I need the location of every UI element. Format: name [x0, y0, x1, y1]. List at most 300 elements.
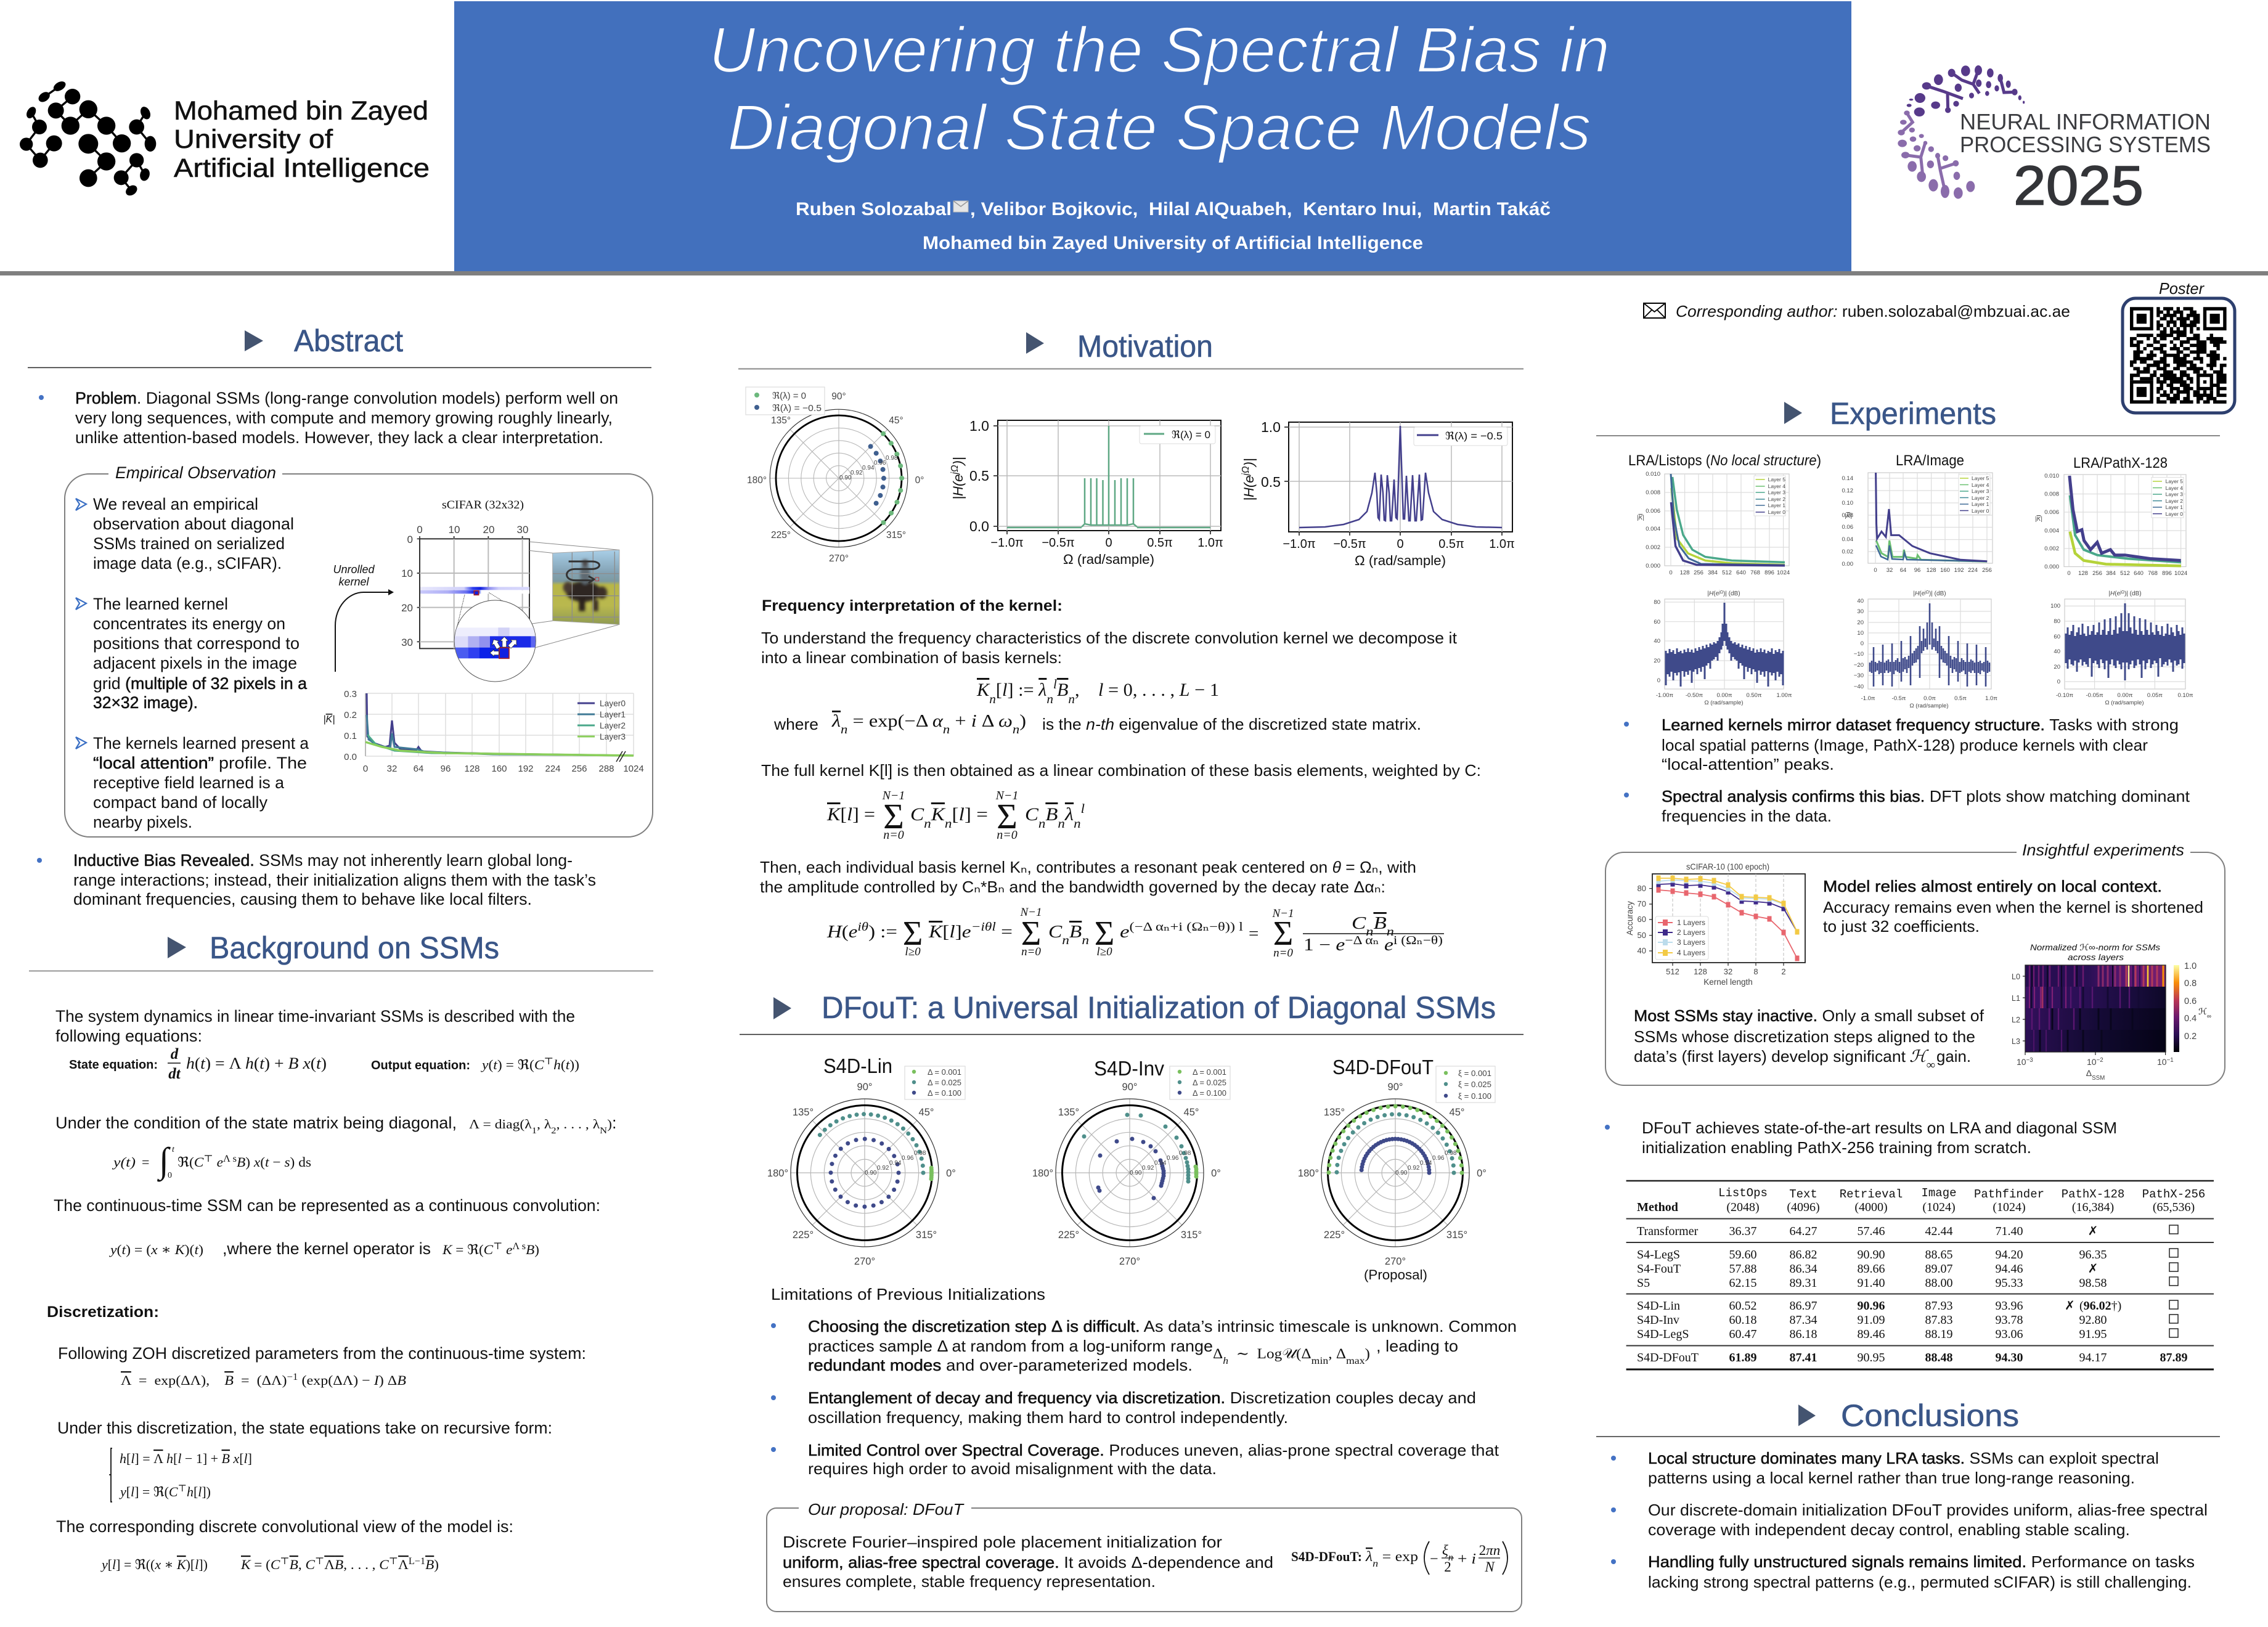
table rows: 57.88 — [1729, 1262, 1756, 1276]
table rows: 94.46 — [1996, 1262, 2023, 1276]
heading: limitations: Limitations of Previous Initializations — [771, 1285, 1045, 1303]
equations: state and output — [69, 1046, 579, 1082]
table header: (1024) — [1922, 1201, 1956, 1214]
equation: discrete convolution — [100, 1556, 439, 1572]
chart: Listops spectrum: 20 — [1654, 658, 1660, 664]
chart: frequency response undamped: Ω (rad/sample) — [1063, 552, 1154, 567]
panel: contact and poster link — [1644, 279, 2235, 413]
arrow: unrolled kernel: kernel — [338, 576, 370, 588]
text: decomposition — [761, 629, 1458, 667]
legend: Layer 5 — [1768, 476, 1785, 483]
chart: LRA/Image kernel: 0.12 — [1842, 487, 1853, 494]
chart: LRA/Listops kernel: 384 — [1708, 569, 1718, 576]
text: most SSMs inactive: data’s (first layers) develop significant — [1634, 1047, 1906, 1066]
legend — [1754, 476, 1785, 516]
table rows: 88.19 — [1925, 1327, 1952, 1341]
panel: insightful experiments — [1605, 841, 2225, 1085]
polar chart: S4D-DFouT: 0.94 — [1420, 1160, 1432, 1167]
table rows: 87.34 — [1790, 1313, 1817, 1327]
title — [709, 14, 1610, 164]
table rows: 42.44 — [1925, 1225, 1952, 1238]
legend: Layer 0 — [2166, 511, 2183, 517]
chart: LRA/PathX-128 kernel: 0.010 — [2044, 473, 2059, 479]
table rows: 36.37 — [1729, 1225, 1756, 1238]
line chart: |K| by position: 96 — [441, 764, 451, 774]
text: system dynamics: following equations: — [55, 1027, 202, 1045]
chart: frequency response undamped: 1.0π — [1197, 536, 1223, 550]
equation: frequency response: N−1 — [1019, 906, 1042, 919]
polar chart: S4D-Lin: 90° — [857, 1082, 872, 1093]
table rows: 88.48 — [1925, 1351, 1952, 1364]
chart: LRA/PathX-128 kernel: 0.004 — [2044, 528, 2059, 534]
MBZUAI wordmark: Mohamed bin Zayed — [174, 96, 428, 126]
equation: frequency response: = — [1249, 924, 1258, 944]
line chart: |K| by position: 1024 — [623, 764, 644, 774]
table rows: 86.18 — [1790, 1327, 1817, 1341]
figure: sCIFAR unrolled kernel: 10 — [401, 568, 413, 579]
chart: LRA/Image kernel: 96 — [1914, 567, 1920, 574]
table rows: 62.15 — [1729, 1276, 1756, 1290]
equations: state and output: d — [171, 1046, 179, 1062]
polar chart: eigenvalues: 135° — [771, 415, 791, 426]
equation: frequency response: l≥0 — [905, 945, 921, 958]
chart: frequency response undamped: ℜ(λ) = 0 — [1172, 429, 1210, 441]
arrow: unrolled kernel — [333, 563, 394, 672]
figure: sCIFAR unrolled kernel: 0 — [407, 534, 413, 545]
equation: S4D-DFouT: + i — [1458, 1551, 1476, 1567]
polar chart: S4D-Inv: 225° — [1058, 1229, 1079, 1241]
polar chart: S4D-Inv: 0.90 — [1130, 1170, 1142, 1176]
table rows: 89.46 — [1858, 1327, 1885, 1341]
table rows: 93.96 — [1996, 1299, 2023, 1313]
polar chart: S4D-DFouT: 0° — [1477, 1168, 1487, 1179]
text: problem — [39, 389, 618, 447]
polar chart: eigenvalues: 0° — [915, 475, 924, 486]
table header: (1024) — [1993, 1201, 2026, 1214]
legend: Δ = 0.100 — [1193, 1088, 1226, 1098]
chart: frequency response undamped: −1.0π — [990, 536, 1024, 550]
figure: sCIFAR unrolled kernel — [333, 499, 619, 682]
chart: LRA/Listops kernel: 768 — [1750, 569, 1760, 576]
polar chart: S4D-Inv: 135° — [1058, 1107, 1079, 1118]
table: results — [1626, 1181, 2214, 1369]
text: full kernel: The full kernel K[l] is then obtained as a linear combination of these basis elements, weighted by C: — [761, 761, 1481, 780]
MBZUAI wordmark — [174, 96, 430, 183]
chart: frequency response undamped: |H(ejΩ)| — [949, 457, 966, 500]
line chart: accuracy vs kernel length: 70 — [1638, 899, 1646, 908]
polar chart: S4D-Lin: 270° — [854, 1256, 875, 1267]
chart: Image spectrum: −30 — [1854, 672, 1864, 679]
panel: motivation — [738, 329, 1524, 960]
chart: PathX-128 spectrum: 0.00π — [2117, 692, 2133, 699]
equation: full kernel: n=0 — [883, 828, 904, 842]
bullet: learned kernels: Learned kernels mirror dataset frequency structure. Tasks with strong — [1662, 716, 2179, 734]
line chart: |K| by position: 32 — [387, 764, 397, 774]
text: discrete convolutional view: The corresponding discrete convolutional view of the model is: — [56, 1517, 513, 1536]
equation: frequency response: K[l]e−iθl = — [928, 920, 1013, 942]
table header: Image — [1921, 1186, 1957, 1200]
bullet: discretization step: redundant modes and over-parameterized models. — [808, 1356, 1193, 1374]
chart: LRA/PathX-128 kernel: LRA/PathX-128 — [2073, 455, 2168, 471]
polar chart: S4D-DFouT — [1298, 1056, 1495, 1282]
text: eigenvalue definition: is the n-th eigenvalue of the discretized state matrix. — [1042, 715, 1421, 733]
polar chart: S4D-Lin: 0.98 — [914, 1150, 926, 1157]
equation: full kernel: CnKn[l] = — [910, 804, 988, 831]
chart: PathX-128 spectrum: -0.05π — [2086, 692, 2103, 699]
legend: Layer 3 — [1768, 489, 1785, 495]
chart: Image spectrum: 0 — [1861, 640, 1864, 647]
panel: our proposal — [767, 1500, 1522, 1612]
bullet: unstructured signals: lacking strong spectral patterns (e.g., permuted sCIFAR) is still challenging. — [1648, 1573, 2192, 1591]
legend: Layer 3 — [2166, 491, 2183, 497]
line chart: |K| by position: Layer1 — [600, 709, 626, 719]
heatmap: H-infinity norm: 0.6 — [2184, 997, 2197, 1006]
bullet: local structure: Local structure dominates many LRA tasks. SSMs can exploit spectral — [1648, 1449, 2159, 1467]
equation: S4D-DFouT: − — [1430, 1551, 1438, 1567]
table rows: 87.93 — [1925, 1299, 1952, 1313]
chart: LRA/Image kernel: 0 — [1874, 567, 1877, 574]
icon: envelope — [1644, 303, 1665, 318]
equation: full kernel: n=0 — [997, 828, 1018, 842]
QR code — [2123, 298, 2235, 413]
heatmap: H-infinity norm: Normalized ℋ∞-norm for SSMs — [2030, 942, 2160, 952]
logo: NeurIPS 2025 — [1898, 65, 2211, 217]
chart: LRA/Listops kernel: 256 — [1694, 569, 1703, 576]
polar chart: eigenvalues — [746, 387, 924, 564]
text: resonant peak — [760, 858, 1416, 896]
polar chart: S4D-Inv: 270° — [1119, 1256, 1140, 1267]
legend: 3 Layers — [1677, 938, 1705, 947]
heading: Experiments — [1596, 396, 2220, 436]
legend — [1436, 1066, 1495, 1103]
authors: , Velibor Bojkovic, Hilal AlQuabeh, Kentaro Inui, Martin Takáč — [970, 199, 1551, 219]
bullet: state of the art: initialization enabling PathX-256 training from scratch. — [1642, 1138, 2031, 1157]
affiliation: Mohamed bin Zayed University of Artificial Intelligence — [923, 233, 1423, 253]
NeurIPS wordmark — [1960, 109, 2211, 217]
bullet: discretization step: Δh ∼ Log𝒰(Δ min, Δmax) — [1213, 1346, 1370, 1366]
bullet: local attention: The kernels learned present a — [93, 734, 309, 752]
bullet: state of the art: DFouT achieves state-of-the-art results on LRA and diagonal SSM — [1642, 1119, 2117, 1137]
text: most SSMs inactive: gain. — [1936, 1047, 1971, 1066]
table header: (16,384) — [2072, 1201, 2114, 1214]
chart: LRA/Image kernel: 0.04 — [1842, 536, 1853, 543]
bullet: learned kernels: local spatial patterns (Image, PathX-128) produce kernels with clear — [1662, 736, 2148, 754]
equation: frequency response: N−1 — [1272, 907, 1294, 920]
bullet: spectral coverage — [771, 1441, 1499, 1478]
legend: Δ = 0.100 — [928, 1088, 961, 1098]
table rows: S4D-LegS — [1637, 1327, 1689, 1341]
legend: Layer 3 — [1972, 488, 1989, 494]
table rows: 91.09 — [1858, 1313, 1885, 1327]
table rows: ✗ — [2065, 1298, 2075, 1313]
line chart: |K| by position: 0.0 — [344, 752, 357, 762]
table rows: 88.65 — [1925, 1248, 1952, 1262]
bullet: local attention: receptive field learned is a — [93, 773, 285, 792]
legend: ℜ(λ) = 0 — [772, 391, 806, 401]
equation: full kernel: N−1 — [882, 789, 905, 802]
heading: Abstract — [28, 324, 651, 367]
table rows: S5 — [1637, 1276, 1650, 1290]
table header: Retrieval — [1840, 1188, 1903, 1201]
text: system dynamics: The system dynamics in linear time-invariant SSMs is described with the — [55, 1007, 575, 1026]
title: Diagonal State Space Models — [727, 92, 1591, 164]
table rows: ✗ — [2088, 1223, 2098, 1238]
chart: Listops spectrum: 1.00π — [1776, 692, 1792, 699]
text: inductive bias: dominant frequencies, causing them to behave like local filters. — [73, 890, 532, 908]
chart: Image spectrum: Ω (rad/sample) — [1909, 703, 1949, 709]
heading: Background on SSMs — [29, 931, 653, 971]
text: eigenvalue definition: where — [773, 715, 818, 733]
line chart: |K| by position: 128 — [464, 764, 480, 774]
equation: frequency response: n=0 — [1021, 945, 1041, 958]
table rows: (96.02†) — [2079, 1299, 2121, 1313]
legend: ξ = 0.025 — [1458, 1080, 1491, 1089]
heatmap: H-infinity norm: ΔSSM — [2086, 1068, 2105, 1081]
equation: frequency response: Σ — [903, 915, 923, 953]
chart: Image spectrum: -0.5π — [1892, 695, 1906, 702]
text: local context: Accuracy remains even when the kernel is shortened — [1823, 898, 2203, 916]
polar chart: S4D-DFouT: 90° — [1388, 1082, 1403, 1093]
bullet: state of the art — [1605, 1119, 2117, 1157]
text: local context: to just 32 coefficients. — [1823, 917, 1980, 936]
chart: LRA/PathX-128 kernel: 0 — [2067, 570, 2071, 577]
equation: frequency response: Σ — [1021, 915, 1041, 953]
equation: integral: = — [142, 1154, 149, 1170]
equation: full kernel — [826, 789, 1085, 842]
chart: Listops spectrum: 80 — [1654, 599, 1660, 606]
chart: Listops spectrum — [1654, 590, 1792, 706]
text: diagonal condition: : — [612, 1114, 617, 1132]
chart: LRA/Image kernel: 256 — [1982, 567, 1992, 574]
table rows: 87.41 — [1790, 1351, 1817, 1364]
polar chart: S4D-Lin: 135° — [793, 1107, 814, 1118]
table rows: 60.52 — [1729, 1299, 1756, 1313]
polar chart: S4D-DFouT: 0.90 — [1395, 1170, 1408, 1176]
heatmap: H-infinity norm: L0 — [2012, 973, 2020, 981]
line chart: |K| by position: Layer2 — [600, 720, 626, 730]
chart: LRA/Listops kernel — [1628, 452, 1821, 576]
table rows: 91.40 — [1858, 1276, 1885, 1290]
polar chart: S4D-Lin: 0.92 — [877, 1165, 889, 1172]
line chart: accuracy vs kernel length: sCIFAR-10 (100 epoch) — [1686, 862, 1769, 871]
table header: (4096) — [1787, 1201, 1820, 1214]
line chart: |K| by position: 192 — [518, 764, 534, 774]
bullet: reveal: SSMs trained on serialized — [93, 534, 285, 553]
table rows: 59.60 — [1729, 1248, 1756, 1262]
legend: Layer 1 — [2166, 504, 2183, 510]
table header: (65,536) — [2153, 1201, 2195, 1214]
polar chart: S4D-DFouT: 45° — [1450, 1107, 1464, 1118]
table header: Text — [1789, 1188, 1817, 1201]
chart: Image spectrum: 40 — [1857, 598, 1864, 605]
bullet: entanglement — [771, 1388, 1476, 1427]
bullet: spectral analysis: frequencies in the data. — [1662, 807, 1832, 825]
line chart: |K| by position: 288 — [598, 764, 614, 774]
table rows: 60.18 — [1729, 1313, 1756, 1327]
chart: LRA/Listops kernel: 0 — [1669, 569, 1673, 576]
table rows: S4-LegS — [1637, 1248, 1680, 1262]
polar chart: S4D-Inv: 0.94 — [1154, 1160, 1167, 1167]
legend: ξ = 0.001 — [1458, 1069, 1491, 1078]
line chart: accuracy vs kernel length: Kernel length — [1703, 977, 1753, 987]
polar chart: S4D-Inv: 0.98 — [1179, 1150, 1191, 1157]
line chart: |K| by position: Layer0 — [600, 698, 626, 708]
equation: full kernel: N−1 — [995, 789, 1018, 802]
table rows: S4-FouT — [1637, 1262, 1681, 1276]
text: inductive bias: range interactions; instead, their initialization aligns them with the task’s — [73, 871, 596, 889]
chart: LRA/PathX-128 kernel: 1024 — [2174, 570, 2187, 577]
line chart: |K| by position: 0.2 — [344, 710, 357, 720]
equation: S4D-DFouT: N — [1484, 1559, 1495, 1575]
equation: ZOH: Λ = exp(ΔΛ), B = (ΔΛ) −1 (exp(ΔΛ) − I) ΔB — [121, 1372, 406, 1388]
text: inductive bias: Inductive Bias Revealed. SSMs may not inherently learn global long- — [73, 851, 573, 870]
chart: LRA/PathX-128 kernel: 128 — [2078, 570, 2088, 577]
polar chart: S4D-Lin: 0.94 — [889, 1160, 902, 1167]
chart: frequency response damped: 1.0π — [1489, 537, 1515, 551]
equation: frequency response: 1 − e−Δ αₙ ei (Ωₙ−θ) — [1303, 934, 1443, 955]
heading: Motivation — [738, 329, 1524, 369]
chart: frequency response damped: −1.0π — [1283, 537, 1316, 551]
icon: NeurIPS dotted arc — [1898, 65, 2025, 199]
text: proposal description — [783, 1533, 1273, 1591]
equation: frequency response: Σ — [1095, 915, 1114, 953]
polar chart: S4D-Lin: 0° — [946, 1168, 956, 1179]
table rows: 60.47 — [1729, 1327, 1756, 1341]
equation: full kernel: Σ — [883, 796, 904, 836]
legend: ℜ(λ) = −0.5 — [772, 403, 822, 414]
equation: S4D-DFouT: 2πn — [1479, 1543, 1500, 1558]
polar chart: S4D-Inv: 45° — [1184, 1107, 1199, 1118]
chart: frequency response undamped: −0.5π — [1042, 536, 1075, 550]
chart: PathX-128 spectrum — [2050, 590, 2193, 706]
MBZUAI wordmark: Artificial Intelligence — [174, 153, 430, 183]
heatmap: H-infinity norm: L1 — [2012, 994, 2020, 1003]
chart: PathX-128 spectrum: 60 — [2054, 634, 2060, 640]
chart: frequency response undamped: 0.5 — [969, 468, 989, 484]
polar chart: S4D-Inv: 90° — [1122, 1082, 1137, 1093]
equation: frequency response: e(−Δ αₙ+i (Ωₙ−θ)) l — [1120, 920, 1243, 942]
figure: sCIFAR unrolled kernel: sCIFAR (32x32) — [442, 499, 524, 512]
text: proposal description: uniform, alias-free spectral coverage. It avoids Δ-dependence and — [783, 1553, 1273, 1572]
line chart: |K| by position: 0.1 — [344, 731, 357, 741]
equation: discrete convolution: y[l] = ℜ((x ∗ K)[l]) — [100, 1557, 208, 1572]
figure: sCIFAR unrolled kernel: 30 — [401, 637, 413, 648]
bullet: unstructured signals: Handling fully unstructured signals remains limited. Performance on tasks — [1648, 1552, 2195, 1571]
legend — [1170, 1066, 1230, 1099]
chart: frequency response damped: |H(ejΩ)| — [1240, 458, 1257, 501]
chart: frequency response undamped — [949, 418, 1223, 567]
equations: state and output: State equation: — [69, 1058, 158, 1072]
bullet: discrete-domain initialization: Our discrete-domain initialization DFouT provides uniform, alias-free spectral — [1648, 1501, 2208, 1519]
equation: S4D-DFouT — [1291, 1541, 1507, 1575]
line chart: |K| by position: 256 — [571, 764, 587, 774]
equation: recursive system — [109, 1448, 252, 1502]
table rows: 94.20 — [1996, 1248, 2023, 1262]
bullet: discrete-domain initialization: coverage with independent decay control, enabling stable scaling. — [1648, 1520, 2130, 1539]
table rows: 86.82 — [1790, 1248, 1817, 1262]
legend — [1655, 916, 1708, 960]
chart: frequency response damped: −0.5π — [1333, 537, 1366, 551]
polar chart: eigenvalues: 0.96 — [874, 460, 886, 467]
table header: Method — [1637, 1201, 1678, 1214]
chart: Image spectrum: 1.0π — [1985, 695, 1997, 702]
legend: Δ = 0.025 — [1193, 1078, 1226, 1087]
polar chart: S4D-DFouT: 0.92 — [1408, 1165, 1420, 1172]
chart: LRA/Listops kernel: |K| — [1637, 515, 1644, 521]
heatmap: H-infinity norm: ℋ∞ — [2198, 1006, 2211, 1019]
equation: integral: ℜ(C⊤ eΛ sB) x(t − s) ds — [177, 1154, 311, 1170]
panel: empirical observation — [65, 463, 653, 837]
chart: LRA/PathX-128 kernel — [2035, 455, 2187, 577]
legend: Δ = 0.025 — [928, 1078, 961, 1087]
chart: LRA/Listops kernel: 512 — [1722, 569, 1732, 576]
text: resonant peak: Then, each individual basis kernel Kₙ, contributes a resonant peak centered on θ = Ωₙ, with — [760, 858, 1416, 876]
heading: DFouT — [740, 990, 1524, 1034]
polar chart: S4D-Inv: S4D-Inv — [1094, 1057, 1164, 1080]
chart: LRA/Image kernel: LRA/Image — [1896, 452, 1964, 469]
chart: Image spectrum: −40 — [1854, 683, 1864, 690]
bullet: learned kernel — [76, 595, 308, 712]
figure: sCIFAR unrolled kernel: 20 — [483, 524, 494, 536]
equation: kernel operator: y(t) = (x ∗ K)(t) — [109, 1242, 203, 1257]
chart: LRA/PathX-128 kernel: 0.002 — [2044, 545, 2059, 552]
authors: Ruben Solozabal — [796, 199, 952, 219]
chart: Listops spectrum: 0 — [1657, 677, 1660, 684]
chart: Listops spectrum: 60 — [1654, 619, 1660, 626]
bullet: learned kernels: “local-attention” peaks. — [1662, 755, 1834, 773]
NeurIPS wordmark: PROCESSING SYSTEMS — [1960, 132, 2211, 157]
panel: conclusions — [1596, 1398, 2220, 1591]
text: resonant peak: the amplitude controlled by Cₙ*Bₙ and the bandwidth governed by the decay rate Δαₙ: — [760, 878, 1385, 896]
table header: Pathfinder — [1974, 1188, 2044, 1201]
bullet: reveal: image data (e.g., sCIFAR). — [93, 554, 282, 573]
polar chart: S4D-Lin — [767, 1054, 965, 1267]
text: continuous convolution: The continuous-time SSM can be represented as a continuous convolution: — [54, 1196, 600, 1215]
chart: LRA/Image kernel: 192 — [1954, 567, 1964, 574]
chart: LRA/Image kernel: 32 — [1887, 567, 1893, 574]
equation: kernel operator — [109, 1239, 539, 1258]
chart: Listops spectrum: -1.00π — [1656, 692, 1674, 699]
polar chart: S4D-Lin: 225° — [793, 1229, 814, 1241]
polar chart: S4D-Inv: 0° — [1211, 1168, 1221, 1179]
bullet: entanglement: oscillation frequency, making them hard to control independently. — [808, 1408, 1288, 1427]
chart: LRA/Image kernel: 0.02 — [1842, 548, 1853, 555]
legend — [746, 387, 825, 415]
equations: state and output: Output equation: — [371, 1059, 470, 1072]
text: diagonal condition — [55, 1114, 617, 1136]
equation: integral: ∫ — [157, 1140, 171, 1182]
legend: Layer 4 — [1768, 483, 1785, 489]
legend: Layer 1 — [1768, 502, 1785, 508]
text: ZOH parameters: Following ZOH discretized parameters from the continuous-time system: — [58, 1344, 586, 1363]
bullet: discretization step — [771, 1317, 1517, 1374]
bullet: local attention: compact band of locally — [93, 793, 268, 812]
table rows: 88.00 — [1925, 1276, 1952, 1290]
chart: LRA/Listops kernel: 0.004 — [1646, 526, 1660, 532]
panel: empirical observation: Empirical Observation — [115, 463, 276, 482]
chart: PathX-128 spectrum: 100 — [2050, 603, 2060, 610]
polar chart: S4D-Lin: 0.96 — [902, 1155, 914, 1162]
chart: Image spectrum: −10 — [1854, 651, 1864, 658]
equation: recursive system: y[l] = ℜ(C⊤h[l]) — [119, 1483, 211, 1499]
chart: LRA/PathX-128 kernel: 640 — [2134, 570, 2144, 577]
text: proposal description: ensures complete, stable frequency representation. — [783, 1572, 1156, 1591]
chart: LRA/Image kernel: 160 — [1940, 567, 1950, 574]
bullet: spectral coverage: Limited Control over Spectral Coverage. Produces uneven, alias-prone spectral coverage that — [808, 1441, 1499, 1459]
legend: ξ = 0.100 — [1458, 1091, 1491, 1101]
table rows: 89.66 — [1858, 1262, 1885, 1276]
chart: frequency response damped: Ω (rad/sample) — [1355, 553, 1446, 568]
